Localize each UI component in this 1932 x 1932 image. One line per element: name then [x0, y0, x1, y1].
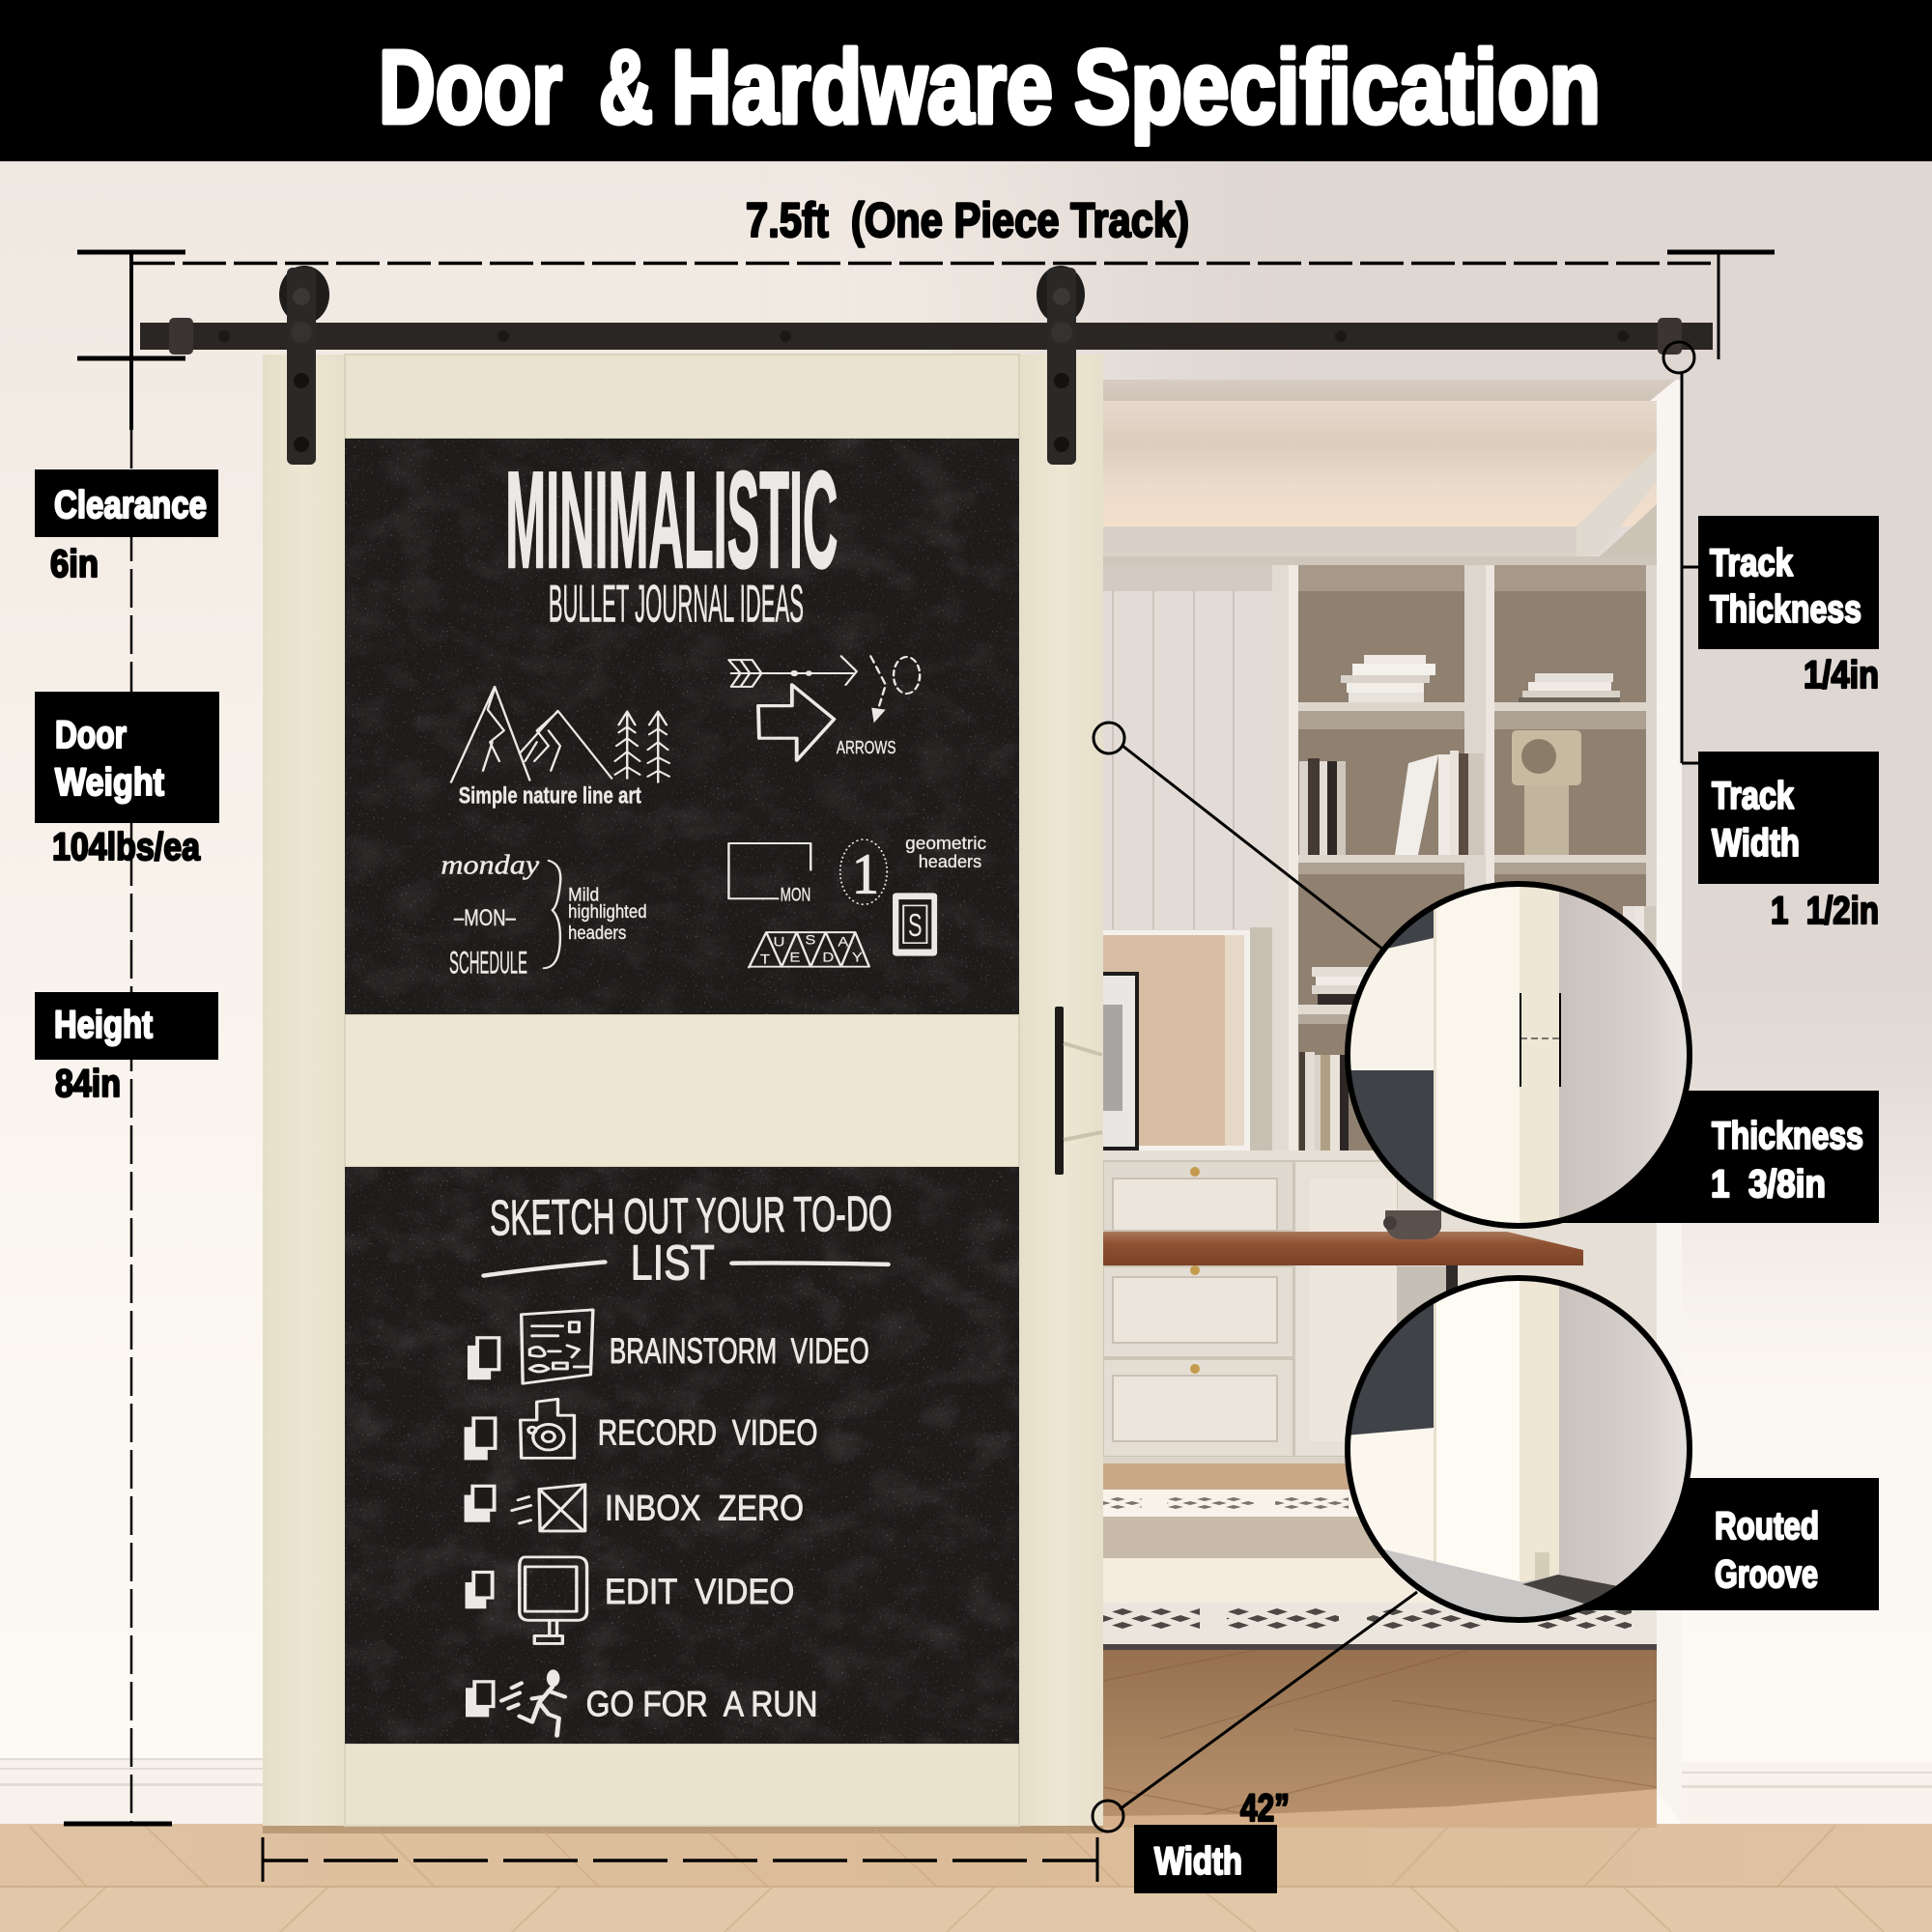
label: routed groove	[1546, 1478, 1879, 1610]
barn door	[263, 355, 1103, 1826]
heading and to-do list	[465, 1186, 893, 1736]
magnifier: routed groove	[1345, 1275, 1692, 1623]
ceiling	[1103, 401, 1657, 526]
heading: minimalistic	[440, 442, 986, 980]
heading and to-do list: SKETCH OUT YOUR TO-DO	[489, 1186, 893, 1246]
label: clearance	[35, 469, 218, 585]
title	[379, 28, 1601, 145]
heading: minimalistic: SCHEDULE	[449, 945, 527, 980]
thickness dimension marks	[1520, 993, 1560, 1087]
title band	[0, 0, 1932, 161]
groove callout leader	[1093, 1592, 1417, 1832]
heading: minimalistic: BULLET JOURNAL IDEAS	[549, 574, 804, 633]
label: track thickness: Track	[1710, 542, 1794, 584]
room interior seen through doorway	[1103, 380, 1682, 1828]
label: clearance: 6in	[50, 543, 99, 585]
base cabinets	[1103, 1151, 1657, 1457]
heading: minimalistic: MON	[781, 883, 810, 905]
label: width: Width	[1154, 1840, 1242, 1883]
heading: minimalistic: Mild	[568, 885, 599, 905]
crown moulding	[1103, 450, 1657, 565]
title: &	[599, 28, 653, 145]
title: Hardware	[671, 28, 1053, 145]
heading and to-do list: EDIT VIDEO	[605, 1572, 794, 1611]
track length label: 7.5ft (One Piece Track)	[746, 193, 1189, 247]
books and sculpture on the shelves	[1299, 655, 1656, 1151]
heading: minimalistic: Simple nature line art	[459, 782, 641, 809]
left end stop	[169, 318, 193, 355]
heading and to-do list: LIST	[631, 1236, 715, 1291]
paneled wall	[1103, 526, 1657, 1151]
label: height	[35, 992, 218, 1105]
heading: minimalistic: E	[789, 951, 800, 965]
track bolts	[218, 330, 1629, 342]
doorway lintel and jamb	[1103, 380, 1682, 1824]
left hanger	[279, 266, 329, 465]
label: height: 84in	[55, 1063, 121, 1105]
heading and to-do list: GO FOR A RUN	[586, 1684, 818, 1724]
title: Specification	[1074, 28, 1601, 145]
heading: minimalistic: headers	[919, 853, 981, 871]
foreground wood floor	[0, 1824, 1932, 1932]
baseboards	[0, 1758, 1932, 1826]
thickness callout leader	[1094, 723, 1383, 950]
heading: minimalistic: monday	[440, 850, 540, 880]
label: routed groove: Routed	[1715, 1505, 1819, 1548]
desk and bowl	[1103, 1210, 1583, 1304]
right end stop	[1658, 318, 1682, 355]
bookshelf	[1272, 565, 1657, 1151]
label: door weight: Weight	[55, 761, 164, 804]
magnifier: door thickness	[1345, 881, 1692, 1229]
rug and room floor	[1103, 1457, 1657, 1828]
label: track width	[1698, 752, 1879, 932]
heading: minimalistic: geometric	[905, 835, 986, 853]
label: routed groove: Groove	[1715, 1553, 1818, 1596]
bottom rail	[345, 1744, 1019, 1826]
heading and to-do list: BRAINSTORM VIDEO	[610, 1331, 869, 1371]
label: door weight: Door	[55, 714, 127, 756]
label: clearance: Clearance	[54, 484, 207, 526]
barn door: MINIMALISTIC	[505, 442, 838, 596]
label: thickness: Thickness	[1712, 1115, 1863, 1157]
heading: minimalistic: S	[805, 933, 815, 948]
label: width	[1134, 1787, 1290, 1893]
label: height: Height	[54, 1004, 153, 1046]
heading: minimalistic: D	[822, 951, 834, 965]
label: track thickness: 1/4in	[1804, 654, 1879, 696]
sliding track hardware	[140, 266, 1713, 465]
upper chalkboard	[345, 439, 1019, 1014]
heading: minimalistic: 1	[852, 843, 879, 906]
door handle	[1055, 1007, 1102, 1175]
heading and to-do list: RECORD VIDEO	[598, 1412, 818, 1452]
heading and to-do list: INBOX ZERO	[605, 1488, 804, 1528]
dimension: door width	[263, 1837, 1097, 1882]
label: thickness	[1546, 1091, 1879, 1223]
top rail	[345, 355, 1019, 439]
right stile	[1019, 355, 1103, 1826]
checkboxes	[465, 1346, 491, 1717]
label: track width: 1 1/2in	[1771, 890, 1879, 932]
label: thickness: 1 3/8in	[1711, 1163, 1826, 1206]
heading: minimalistic: S	[908, 907, 923, 943]
label: door weight	[35, 692, 219, 868]
track rail	[140, 323, 1713, 350]
track callout leader	[1663, 342, 1698, 763]
label: track width: Width	[1712, 822, 1800, 865]
heading: minimalistic: A	[838, 935, 848, 950]
left stile	[263, 355, 345, 1826]
label: track thickness	[1698, 516, 1879, 696]
heading: minimalistic: ARROWS	[837, 739, 895, 758]
framed art	[1103, 930, 1250, 1151]
heading: minimalistic: U	[773, 935, 784, 950]
heading: minimalistic: headers	[568, 923, 626, 943]
label: track width: Track	[1712, 775, 1795, 817]
label: track thickness: Thickness	[1710, 588, 1861, 631]
lower chalkboard	[345, 1167, 1019, 1744]
title: Door	[379, 28, 562, 145]
middle rail	[345, 1014, 1019, 1167]
right hanger	[1037, 266, 1085, 465]
heading: minimalistic: T	[760, 952, 770, 967]
heading: minimalistic: Y	[852, 951, 863, 965]
dimension: left height line	[64, 252, 185, 1824]
label: width: 42”	[1240, 1787, 1290, 1830]
label: door weight: 104lbs/ea	[52, 826, 201, 868]
heading: minimalistic: –MON–	[454, 905, 516, 930]
heading: minimalistic: highlighted	[568, 902, 647, 923]
